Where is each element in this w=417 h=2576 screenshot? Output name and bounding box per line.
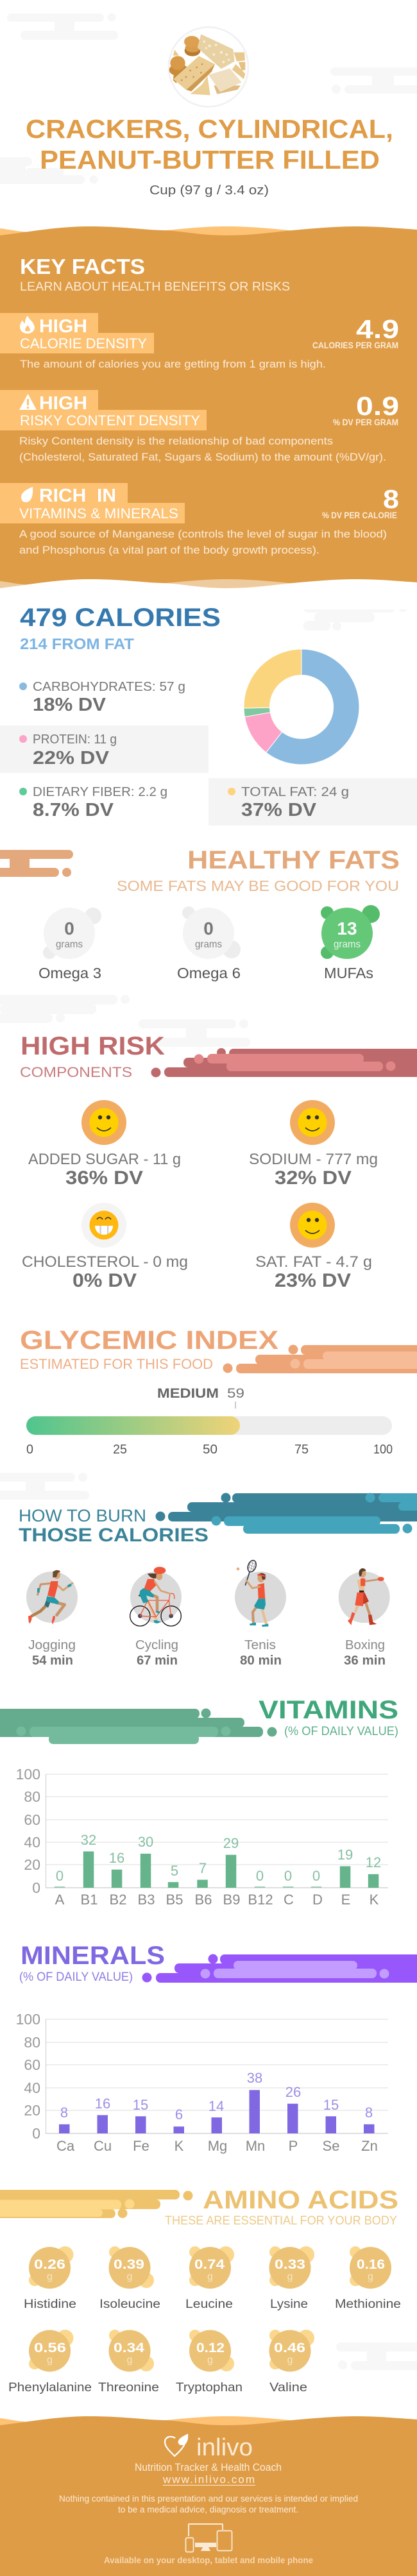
donut chart: calorie composition <box>244 649 359 765</box>
bar chart: minerals: Fe <box>133 2138 149 2154</box>
fact: risky content density: % DV PER GRAM <box>333 418 398 427</box>
bar chart: vitamins: A <box>55 1892 65 1908</box>
title: PEANUT-BUTTER FILLED <box>40 145 380 174</box>
fact: risky content density: (Cholesterol, Saturated Fat, Sugars & Sodium) to the amount (%DV/gr). <box>19 451 386 463</box>
item: leucine: g <box>207 2271 213 2282</box>
heading: amino acids: AMINO ACIDS <box>203 2186 398 2214</box>
bar chart: minerals: Cu <box>94 2138 112 2154</box>
disclaimer <box>59 2493 358 2514</box>
bar chart: minerals: 38 <box>247 2070 262 2086</box>
icon: jogger <box>26 1570 78 1625</box>
header: food photo, title and serving <box>26 27 393 198</box>
heading: amino acids: THESE ARE ESSENTIAL FOR YOUR BODY <box>165 2214 397 2228</box>
bar chart: vitamins: 5 <box>171 1863 178 1879</box>
heading: glycemic index <box>20 1325 278 1372</box>
banner: minerals ribbon <box>142 1954 417 1983</box>
activity: jogging: Jogging <box>28 1638 76 1652</box>
icon: grinning face <box>81 1203 126 1248</box>
stat: omega 6: Omega 6 <box>177 965 241 981</box>
bar chart: minerals: 15 <box>323 2097 339 2113</box>
bar chart: vitamins: K <box>370 1892 379 1908</box>
item: sodium: 32% DV <box>275 1167 352 1189</box>
bar chart: minerals: 8 <box>60 2105 68 2121</box>
bar chart: minerals: 60 <box>24 2056 40 2073</box>
bar chart: minerals: K <box>174 2138 184 2154</box>
icon: smiley <box>290 1100 335 1145</box>
banner: amino ribbon <box>0 2190 192 2218</box>
gauge scale: 75 <box>294 1443 309 1457</box>
gauge bar <box>26 1416 392 1435</box>
item: methionine: g <box>368 2271 373 2282</box>
item: histidine: g <box>47 2271 53 2282</box>
stat: protein <box>0 725 208 773</box>
bar chart: vitamins: 0 <box>32 1879 40 1896</box>
heading: glycemic index: GLYCEMIC INDEX <box>20 1325 278 1355</box>
item: valine <box>269 2330 314 2394</box>
stat: protein: 22% DV <box>33 748 110 768</box>
stat: total fat: TOTAL FAT: 24 g <box>241 784 349 799</box>
bar chart: vitamins: B12 <box>248 1892 273 1908</box>
heading: high risk <box>20 1032 165 1080</box>
bar chart: vitamins: B9 <box>223 1892 240 1908</box>
stat: dietary fiber: 8.7% DV <box>33 800 114 820</box>
bar chart: vitamins: 0 <box>56 1868 64 1884</box>
item: added sugar: ADDED SUGAR - 11 g <box>28 1151 181 1168</box>
item: isoleucine: g <box>127 2271 132 2282</box>
heading: minerals: MINERALS <box>21 1942 165 1970</box>
stat: omega 3: grams <box>56 939 83 950</box>
bar chart: minerals: Zn <box>361 2138 378 2154</box>
stat: omega 3: 0 <box>64 919 74 938</box>
item: isoleucine: 0.39 <box>114 2257 144 2272</box>
heading: key facts: KEY FACTS <box>20 255 145 278</box>
fact: risky content density: Risky Content density is the relationship of bad components <box>19 435 333 447</box>
stat: mufas: MUFAs <box>324 965 373 981</box>
activity: tennis <box>235 1559 286 1668</box>
fact: calorie density: 4.9 <box>356 314 399 344</box>
item: threonine: g <box>127 2355 132 2366</box>
bar chart: minerals: 40 <box>24 2080 40 2096</box>
item: tryptophan <box>176 2330 243 2394</box>
heading: healthy fats <box>117 846 400 894</box>
bar chart: vitamins: 30 <box>138 1834 153 1850</box>
serving size: Cup (97 g / 3.4 oz) <box>149 183 269 198</box>
stat: protein: PROTEIN: 11 g <box>33 732 117 747</box>
panel: minerals <box>16 1942 417 2154</box>
bar chart: vitamins: 40 <box>24 1834 40 1851</box>
item: lysine: Lysine <box>270 2297 308 2311</box>
stat: omega 3 <box>38 908 101 981</box>
item: tryptophan: 0.12 <box>196 2341 225 2355</box>
heading: amino acids <box>165 2186 398 2228</box>
item: added sugar: 36% DV <box>65 1167 143 1189</box>
bar chart: vitamins: 80 <box>24 1788 40 1805</box>
fact: calorie density: The amount of calories you are getting from 1 gram is high. <box>20 358 326 370</box>
item: leucine: Leucine <box>185 2297 233 2311</box>
gauge label: medium 59 <box>157 1386 244 1409</box>
bar chart: vitamins: 60 <box>24 1811 40 1828</box>
stat: carbohydrates: CARBOHYDRATES: 57 g <box>33 679 185 694</box>
gauge scale: 25 <box>113 1443 127 1457</box>
item: phenylalanine: g <box>47 2355 53 2366</box>
stat: omega 3: Omega 3 <box>38 965 101 981</box>
icon: leaf <box>21 487 33 502</box>
fact: rich in vitamins and minerals: and Phosphorus (a vital part of the body growth process). <box>19 544 319 556</box>
activity: jogging: 54 min <box>32 1654 73 1668</box>
item: cholesterol <box>22 1203 188 1291</box>
website link: www.inlivo.com <box>162 2473 255 2486</box>
fact: risky content density: RISKY CONTENT DENSITY <box>20 412 200 428</box>
item: methionine <box>335 2246 401 2311</box>
gauge scale: 0 <box>26 1443 33 1457</box>
item: cholesterol: CHOLESTEROL - 0 mg <box>22 1253 188 1271</box>
heading: 479 calories: 214 FROM FAT <box>20 636 134 653</box>
panel: glycemic index <box>20 1325 417 1457</box>
stat: total fat: 37% DV <box>241 800 317 820</box>
title <box>26 114 393 174</box>
bar chart: vitamins: B1 <box>81 1892 98 1908</box>
panel: healthy fats <box>0 846 400 981</box>
tagline: Nutrition Tracker & Health Coach <box>135 2462 282 2473</box>
item: saturated fat: SAT. FAT - 4.7 g <box>255 1253 372 1271</box>
fact: risky content density: HIGH <box>39 393 87 414</box>
heading: 479 calories <box>20 604 221 653</box>
activity: tennis: 80 min <box>240 1654 282 1668</box>
bar chart: minerals <box>16 2011 388 2154</box>
bar chart: vitamins: 12 <box>366 1854 381 1870</box>
activity: cycling <box>130 1567 182 1668</box>
item: valine: g <box>287 2355 293 2366</box>
item: sodium <box>249 1100 378 1189</box>
icon: flame <box>20 316 35 334</box>
bar chart: vitamins: 0 <box>256 1868 264 1884</box>
item: isoleucine <box>99 2246 160 2311</box>
item: phenylalanine: 0.56 <box>34 2341 66 2355</box>
bar chart: vitamins: B3 <box>138 1892 155 1908</box>
item: saturated fat: 23% DV <box>275 1270 351 1291</box>
fact: rich in vitamins and minerals: % DV PER CALORIE <box>322 511 397 520</box>
item: histidine: 0.26 <box>34 2257 65 2272</box>
activity: jogging <box>26 1570 78 1668</box>
icon: warning triangle <box>19 394 37 410</box>
bar chart: vitamins: 100 <box>16 1766 40 1783</box>
title: CRACKERS, CYLINDRICAL, <box>26 114 393 144</box>
bar chart: vitamins: 19 <box>337 1847 353 1863</box>
disclaimer: Nothing contained in this presentation and our services is intended or implied <box>59 2493 358 2504</box>
bar chart: vitamins: 7 <box>199 1860 207 1876</box>
bar chart: vitamins: D <box>312 1892 323 1908</box>
item: sodium: SODIUM - 777 mg <box>249 1151 378 1168</box>
gauge scale <box>26 1443 393 1457</box>
heading: how to burn: HOW TO BURN <box>19 1506 146 1525</box>
panel: amino acids <box>0 2186 401 2394</box>
heading: vitamins: VITAMINS <box>259 1696 398 1724</box>
activity: cycling: 67 min <box>137 1654 178 1668</box>
bar chart: minerals: Ca <box>56 2138 75 2154</box>
item: threonine: 0.34 <box>114 2341 144 2355</box>
icon: tennis player <box>235 1559 286 1627</box>
banner: high risk ribbon <box>151 1048 417 1078</box>
activity: tennis: Tenis <box>244 1638 276 1652</box>
item: threonine: Threonine <box>98 2380 159 2394</box>
logo: inlivo: inlivo <box>196 2434 253 2461</box>
icon: boxer <box>339 1568 390 1625</box>
activity: boxing: Boxing <box>345 1638 385 1652</box>
fact: calorie density: HIGH <box>39 316 87 337</box>
stat: mufas: grams <box>334 939 361 950</box>
stat: omega 6 <box>177 906 241 981</box>
stat: dietary fiber: DIETARY FIBER: 2.2 g <box>33 784 167 799</box>
item: phenylalanine: Phenylalanine <box>8 2380 92 2394</box>
bar chart: vitamins: B6 <box>195 1892 212 1908</box>
heading: glycemic index: ESTIMATED FOR THIS FOOD <box>20 1356 213 1372</box>
item: histidine: Histidine <box>24 2297 76 2311</box>
fact: rich in vitamins and minerals: A good source of Manganese (controls the level of sugar in the blood) <box>19 528 387 540</box>
heading: key facts <box>20 255 290 294</box>
gauge scale: 50 <box>203 1443 217 1457</box>
panel: footer <box>0 2416 417 2576</box>
bar chart: minerals: 26 <box>285 2084 301 2100</box>
bar chart: vitamins: E <box>341 1892 350 1908</box>
stat: omega 6: grams <box>195 939 222 950</box>
panel: key facts <box>0 226 417 609</box>
item: tryptophan: g <box>207 2355 213 2366</box>
icon: devices <box>186 2524 232 2552</box>
availability note: Available on your desktop, tablet and mobile phone <box>104 2555 313 2565</box>
stat: mufas <box>321 905 380 981</box>
fact: risky content density <box>0 390 399 463</box>
bar chart: minerals: Mg <box>208 2138 227 2154</box>
gauge label: medium 59: 59 <box>227 1386 244 1401</box>
logo: inlivo <box>165 2434 253 2461</box>
bar chart: minerals: 15 <box>133 2097 148 2113</box>
item: lysine: 0.33 <box>275 2257 305 2272</box>
bar chart: vitamins: 0 <box>312 1868 320 1884</box>
item: added sugar <box>28 1100 181 1189</box>
fact: rich in vitamins and minerals: RICH IN <box>39 486 116 506</box>
bar chart: minerals: Se <box>323 2138 339 2154</box>
fact: calorie density: CALORIE DENSITY <box>20 335 147 352</box>
heading: 479 calories: 479 CALORIES <box>20 604 221 632</box>
bar chart: vitamins: C <box>284 1892 294 1908</box>
item: methionine: 0.16 <box>357 2257 385 2272</box>
item: lysine <box>269 2246 314 2311</box>
bar chart: minerals: 80 <box>24 2034 40 2051</box>
heading: high risk: HIGH RISK <box>21 1032 165 1060</box>
fact: rich in vitamins and minerals: 8 <box>383 484 399 514</box>
stat: dietary fiber <box>19 784 167 820</box>
item: valine: 0.46 <box>274 2341 305 2355</box>
stat: total fat <box>208 778 417 826</box>
fact: calorie density <box>0 313 399 370</box>
item: threonine <box>98 2330 159 2394</box>
activity: boxing: 36 min <box>344 1654 386 1668</box>
item: phenylalanine <box>8 2330 92 2394</box>
bar chart: vitamins: 29 <box>223 1835 239 1851</box>
panel: high risk components <box>20 1032 417 1291</box>
item: histidine <box>24 2246 76 2311</box>
item: isoleucine: Isoleucine <box>99 2297 160 2311</box>
banner: vitamins ribbon <box>0 1709 277 1744</box>
heading: minerals <box>19 1942 165 1984</box>
item: saturated fat <box>255 1203 372 1291</box>
heading: high risk: COMPONENTS <box>20 1064 132 1080</box>
bar chart: vitamins: B5 <box>166 1892 183 1908</box>
banner: glycemic ribbon <box>223 1344 417 1373</box>
stat: omega 6: 0 <box>203 919 214 938</box>
stat: carbohydrates: 18% DV <box>33 695 106 715</box>
heading: how to burn: THOSE CALORIES <box>19 1525 208 1546</box>
item: tryptophan: Tryptophan <box>176 2380 243 2394</box>
icon: smiley <box>81 1100 126 1145</box>
heading: vitamins <box>259 1696 398 1738</box>
fact: rich in vitamins and minerals <box>0 483 399 556</box>
bar chart: minerals: 16 <box>95 2096 110 2112</box>
item: leucine <box>185 2246 234 2311</box>
bar chart: minerals: 0 <box>32 2125 40 2142</box>
banner: burn ribbon <box>155 1493 417 1534</box>
item: cholesterol: 0% DV <box>72 1270 137 1291</box>
bar chart: minerals: 14 <box>208 2098 224 2114</box>
bar chart: minerals: 20 <box>24 2102 40 2119</box>
activity: cycling: Cycling <box>135 1638 178 1652</box>
heading: key facts: LEARN ABOUT HEALTH BENEFITS OR RISKS <box>20 280 290 294</box>
bar chart: minerals: 100 <box>16 2011 40 2028</box>
bar chart: vitamins <box>16 1766 388 1908</box>
item: valine: Valine <box>269 2380 307 2394</box>
bar chart: minerals: 6 <box>175 2106 183 2123</box>
bar chart: vitamins: 16 <box>109 1850 124 1866</box>
item: lysine: g <box>287 2271 293 2282</box>
fact: rich in vitamins and minerals: VITAMINS & MINERALS <box>19 505 178 521</box>
icon: smiley <box>290 1203 335 1248</box>
photo: crackers <box>169 27 248 106</box>
fact: calorie density: CALORIES PER GRAM <box>312 341 398 350</box>
panel: vitamins <box>0 1696 398 1908</box>
banner: healthy fats ribbon <box>0 850 73 877</box>
heading: minerals: (% OF DAILY VALUE) <box>19 1970 133 1984</box>
activity: boxing <box>339 1568 390 1668</box>
bar chart: minerals: P <box>289 2138 298 2154</box>
item: leucine: 0.74 <box>194 2257 225 2272</box>
bar chart: vitamins: 32 <box>81 1832 96 1848</box>
panel: calories <box>0 604 417 826</box>
gauge label: medium 59: MEDIUM <box>157 1386 219 1401</box>
bar chart: vitamins: B2 <box>110 1892 126 1908</box>
stat: mufas: 13 <box>337 919 357 938</box>
heading: healthy fats: HEALTHY FATS <box>187 846 400 874</box>
bar chart: vitamins: 0 <box>284 1868 292 1884</box>
gauge scale: 100 <box>373 1443 393 1457</box>
bar chart: vitamins: 20 <box>24 1856 40 1873</box>
panel: how to burn those calories <box>19 1493 417 1668</box>
disclaimer: to be a medical advice, diagnosis or treatment. <box>118 2504 298 2514</box>
fact: risky content density: 0.9 <box>356 391 399 421</box>
heading: healthy fats: SOME FATS MAY BE GOOD FOR YOU <box>117 877 399 894</box>
bar chart: minerals: Mn <box>246 2138 265 2154</box>
heading: how to burn <box>19 1506 208 1546</box>
bar chart: minerals: 8 <box>365 2105 373 2121</box>
icon: cyclist <box>130 1567 182 1626</box>
stat: carbohydrates <box>19 679 185 715</box>
item: methionine: Methionine <box>335 2297 401 2311</box>
heading: vitamins: (% OF DAILY VALUE) <box>284 1725 398 1738</box>
